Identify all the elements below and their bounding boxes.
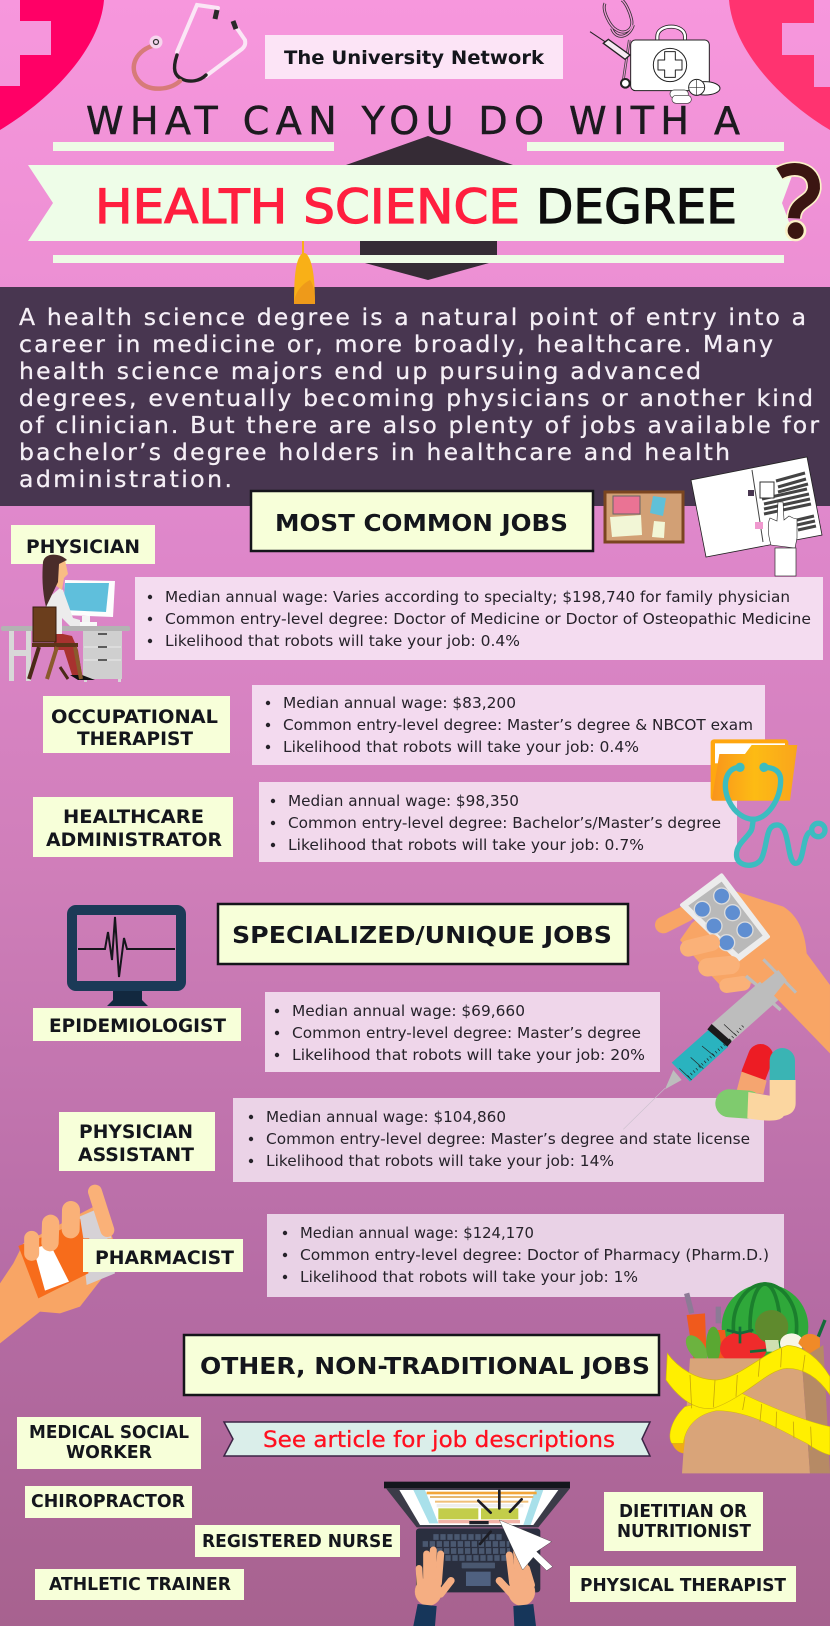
- heading: specialized/unique jobs: [218, 904, 628, 964]
- icon: hand with prescription: [0, 1192, 115, 1343]
- icon: document and hand: [691, 457, 822, 576]
- label: dietitian or nutritionist: DIETITIAN OR: [619, 1501, 747, 1522]
- heading: specialized/unique jobs: SPECIALIZED/UNIQUE JOBS: [232, 921, 612, 949]
- intro text: administration.: [19, 465, 232, 493]
- label: occupational therapist: OCCUPATIONAL: [51, 706, 218, 728]
- label: physician assistant: PHYSICIAN: [79, 1121, 193, 1143]
- label: healthcare administrator: [33, 797, 233, 857]
- intro text: A health science degree is a natural point of entry into a: [19, 303, 806, 331]
- heading: most common jobs: [251, 491, 593, 551]
- label: physician assistant: ASSISTANT: [78, 1144, 194, 1166]
- label: pharmacist: [83, 1239, 243, 1272]
- intro text: [19, 303, 819, 493]
- badge: The University Network: [265, 35, 563, 79]
- title line 1: WHAT CAN YOU DO WITH A: [86, 99, 740, 143]
- icon: grocery bag and measuring tape: [666, 1284, 830, 1473]
- label: occupational therapist: [43, 696, 230, 753]
- icon: heart monitor: [72, 910, 181, 1006]
- title ribbon: health science degree: HEALTH SCIENCE: [95, 180, 520, 235]
- details: healthcare administrator: [259, 782, 737, 862]
- job: occupational therapist: [43, 685, 765, 765]
- job: physician: [11, 525, 823, 660]
- details: healthcare administrator: Likelihood that robots will take your job: 0.7%: [288, 836, 644, 854]
- label: dietitian or nutritionist: NUTRITIONIST: [617, 1521, 752, 1542]
- details: physician assistant: [233, 1098, 764, 1182]
- heading: most common jobs: MOST COMMON JOBS: [275, 509, 568, 537]
- details: physician: [135, 577, 823, 660]
- job: healthcare administrator: [33, 782, 737, 862]
- details: epidemiologist: Common entry-level degree: Master’s degree: [292, 1024, 641, 1042]
- details: epidemiologist: Median annual wage: $69,660: [292, 1002, 525, 1020]
- banner: see article for job descriptions: See article for job descriptions: [263, 1427, 615, 1453]
- decorative cap: hexagon: [346, 136, 513, 280]
- intro text: health science majors end up pursuing advanced: [19, 357, 701, 385]
- icon: physician at desk: [1, 555, 130, 682]
- label: medical social worker: MEDICAL SOCIAL: [29, 1422, 189, 1443]
- label: medical social worker: WORKER: [66, 1442, 152, 1463]
- icon: stethoscope outline: [134, 5, 245, 89]
- label: epidemiologist: [33, 1008, 241, 1041]
- label: pharmacist: PHARMACIST: [95, 1247, 234, 1269]
- details: healthcare administrator: Median annual wage: $98,350: [288, 792, 519, 810]
- intro text: of clinician. But there are also plenty of jobs available for: [19, 411, 819, 439]
- heading: other, non-traditional jobs: [184, 1335, 659, 1395]
- job: pharmacist details: [267, 1214, 784, 1297]
- details: occupational therapist: [252, 685, 765, 765]
- intro text: degrees, eventually becoming physicians or another kind: [19, 384, 813, 412]
- label: physical therapist: PHYSICAL THERAPIST: [580, 1575, 787, 1596]
- label: epidemiologist: EPIDEMIOLOGIST: [49, 1015, 226, 1037]
- label: medical social worker: [17, 1417, 201, 1469]
- label: chiropractor: CHIROPRACTOR: [31, 1491, 185, 1512]
- label: registered nurse: [195, 1525, 400, 1557]
- icon: question mark: [779, 169, 814, 241]
- details: healthcare administrator: Common entry-level degree: Bachelor’s/Master’s degree: [288, 814, 721, 832]
- icon: hand with pill blister and syringe: [623, 875, 830, 1129]
- job: pharmacist details: Common entry-level degree: Doctor of Pharmacy (Pharm.D.): [300, 1246, 769, 1264]
- icon: laptop with hands and cursor: [384, 1482, 570, 1626]
- intro panel: [0, 287, 830, 506]
- label: physician: [11, 525, 155, 564]
- intro text: bachelor’s degree holders in healthcare and health: [19, 438, 730, 466]
- label: physical therapist: [570, 1566, 796, 1602]
- label: athletic trainer: [35, 1569, 244, 1600]
- label: occupational therapist: THERAPIST: [77, 728, 193, 750]
- icon: folder with stethoscope: [711, 739, 825, 865]
- details: occupational therapist: Likelihood that robots will take your job: 0.4%: [283, 738, 639, 756]
- icon: capsules: [729, 1057, 796, 1121]
- intro text: career in medicine or, more broadly, healthcare. Many: [19, 330, 773, 358]
- label: dietitian or nutritionist: [604, 1492, 763, 1551]
- details: occupational therapist: Common entry-level degree: Master’s degree & NBCOT exam: [283, 716, 753, 734]
- job: epidemiologist: [33, 992, 660, 1072]
- label: athletic trainer: ATHLETIC TRAINER: [49, 1574, 231, 1595]
- banner: see article for job descriptions: [224, 1422, 650, 1456]
- label: physician: PHYSICIAN: [26, 536, 140, 558]
- title ribbon: health science degree: [28, 165, 796, 241]
- details: epidemiologist: [265, 992, 660, 1072]
- label: healthcare administrator: HEALTHCARE: [63, 806, 204, 828]
- details: physician assistant: Median annual wage: $104,860: [266, 1108, 506, 1126]
- badge: The University Network: The University Network: [284, 47, 544, 69]
- job: physician assistant: [59, 1098, 764, 1182]
- job: pharmacist details: Median annual wage: $124,170: [300, 1224, 534, 1242]
- corner shape: top right: [729, 0, 830, 130]
- label: physician assistant: [59, 1112, 215, 1171]
- label: chiropractor: [25, 1486, 192, 1518]
- corner shape: top left: [0, 0, 104, 130]
- heading: other, non-traditional jobs: OTHER, NON-TRADITIONAL JOBS: [200, 1352, 650, 1380]
- label: healthcare administrator: ADMINISTRATOR: [46, 829, 222, 851]
- title ribbon: health science degree: DEGREE: [536, 180, 737, 235]
- details: physician: Median annual wage: Varies according to specialty; $198,740 for family physician: [165, 588, 790, 606]
- icon: graduation tassel: [294, 241, 315, 304]
- details: physician assistant: Common entry-level degree: Master’s degree and state license: [266, 1130, 750, 1148]
- details: epidemiologist: Likelihood that robots will take your job: 20%: [292, 1046, 645, 1064]
- icon: corkboard: [605, 492, 683, 542]
- job: pharmacist details: Likelihood that robots will take your job: 1%: [300, 1268, 638, 1286]
- details: occupational therapist: Median annual wage: $83,200: [283, 694, 516, 712]
- icon: medical kit with stethoscope, syringe and pills: [590, 0, 720, 103]
- details: physician: Likelihood that robots will take your job: 0.4%: [165, 632, 520, 650]
- details: physician: Common entry-level degree: Doctor of Medicine or Doctor of Osteopathic Medicine: [165, 610, 811, 628]
- details: physician assistant: Likelihood that robots will take your job: 14%: [266, 1152, 614, 1170]
- label: registered nurse: REGISTERED NURSE: [202, 1531, 393, 1552]
